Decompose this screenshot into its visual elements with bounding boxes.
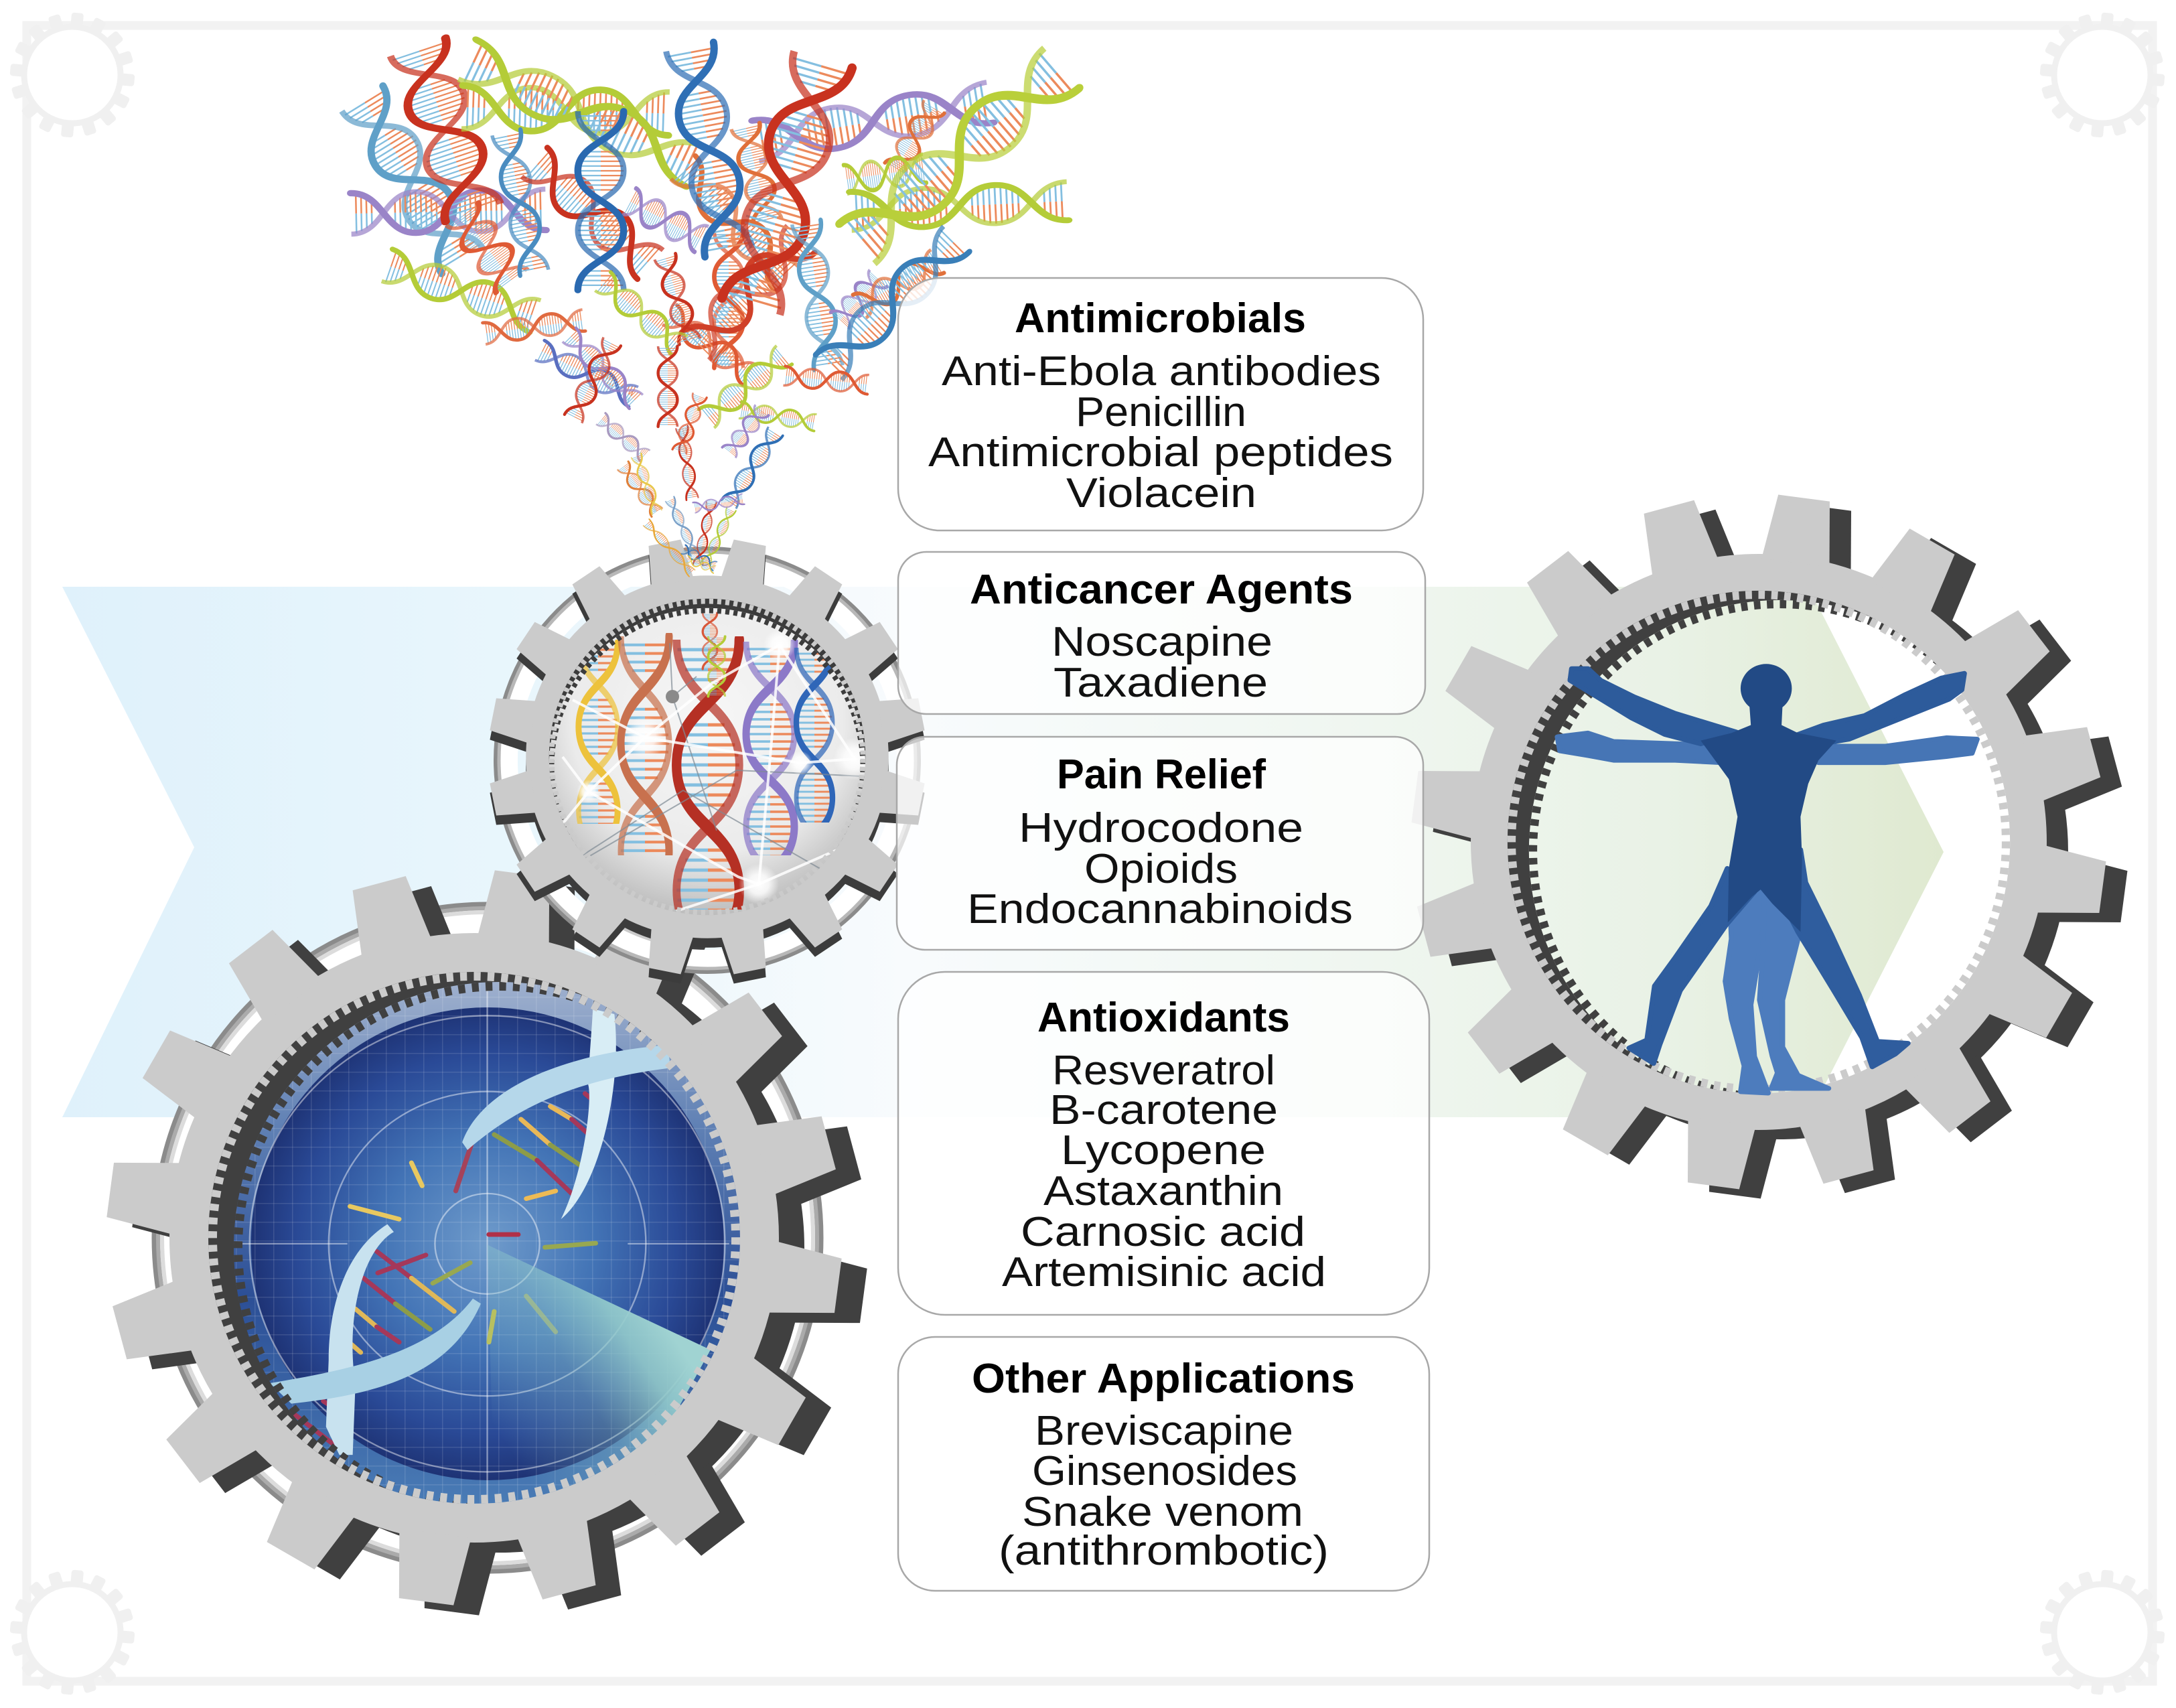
list: Endocannabinoids <box>967 886 1353 932</box>
gear body shadow <box>131 879 868 1616</box>
list: Ginsenosides <box>1032 1448 1297 1494</box>
list: Hydrocodone <box>1019 805 1303 851</box>
list: Noscapine <box>1051 619 1273 665</box>
gear body <box>1410 494 2107 1190</box>
panel: other applications <box>898 1337 1429 1591</box>
list: Lycopene <box>1061 1127 1266 1173</box>
gear body <box>106 869 843 1606</box>
panel: anticancer agents <box>898 552 1425 714</box>
list: Opioids <box>1084 846 1238 892</box>
icon: Vitruvian man <box>1557 664 1977 1093</box>
gear body <box>474 524 940 990</box>
arrow: chevron band <box>62 587 1944 1117</box>
heading: Other Applications <box>972 1356 1355 1402</box>
list: (antithrombotic) <box>999 1528 1329 1574</box>
gear body shadow <box>474 533 940 999</box>
list <box>999 1408 1329 1574</box>
panel: antimicrobials <box>898 278 1423 530</box>
list: Snake venom <box>1022 1489 1303 1535</box>
list: Violacein <box>1066 470 1256 516</box>
metal ring <box>154 904 821 1571</box>
icon: corner gear top right <box>2040 13 2165 137</box>
list: Penicillin <box>1076 389 1246 435</box>
panel: pain relief <box>897 737 1423 950</box>
list: Breviscapine <box>1035 1408 1293 1454</box>
gear: large DNA radar gear <box>106 869 868 1616</box>
gear: Vitruvian man gear <box>1410 494 2128 1200</box>
metal ring <box>496 549 919 972</box>
list: Resveratrol <box>1052 1048 1275 1094</box>
list: Carnosic acid <box>1021 1209 1305 1255</box>
icon: corner gear top left <box>10 13 135 137</box>
radar disc with DNA <box>234 982 740 1504</box>
list <box>928 348 1393 516</box>
list <box>1051 619 1273 706</box>
list: Antimicrobial peptides <box>928 429 1393 476</box>
gear body shadow <box>1432 503 2128 1200</box>
DNA network disc <box>549 608 865 915</box>
gear: small DNA network gear <box>490 540 924 983</box>
list: Artemisinic acid <box>1002 1249 1326 1295</box>
panel: antioxidants <box>898 972 1429 1315</box>
icon: DNA funnel <box>342 38 1079 576</box>
heading: Antioxidants <box>1037 995 1290 1041</box>
list: Astaxanthin <box>1043 1168 1283 1214</box>
heading: Anticancer Agents <box>970 567 1353 613</box>
heading: Pain Relief <box>1057 752 1266 798</box>
icon: corner gear bottom right <box>2040 1570 2165 1695</box>
heading: Antimicrobials <box>1015 295 1306 342</box>
list: B-carotene <box>1049 1087 1278 1133</box>
list: Anti-Ebola antibodies <box>942 348 1381 395</box>
list <box>967 805 1353 932</box>
list <box>1002 1048 1326 1295</box>
icon: corner gear bottom left <box>10 1570 135 1695</box>
list: Taxadiene <box>1054 660 1268 706</box>
